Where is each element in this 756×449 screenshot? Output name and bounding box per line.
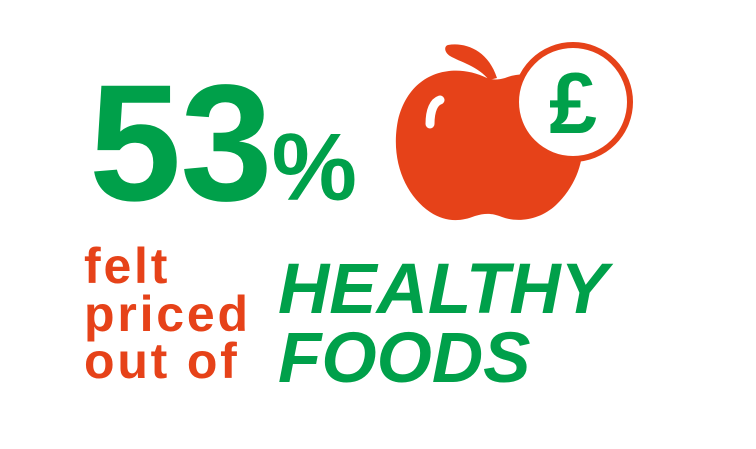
text block: felt priced out of: out of (84, 333, 240, 389)
heading: HEALTHY FOODS (278, 250, 614, 398)
text block: felt priced out of (84, 238, 251, 389)
apple body (396, 71, 583, 220)
text block: felt priced out of: priced (84, 286, 251, 342)
icon: apple with pound sign: £ (549, 56, 597, 152)
heading: HEALTHY FOODS: HEALTHY (278, 250, 608, 329)
text block: felt priced out of: felt (84, 238, 170, 294)
stat: 53%: 53% (89, 51, 357, 236)
stem/leaf (445, 44, 497, 80)
heading: HEALTHY FOODS: FOODS (278, 319, 530, 398)
pound circle (516, 45, 630, 159)
highlight (430, 100, 440, 124)
